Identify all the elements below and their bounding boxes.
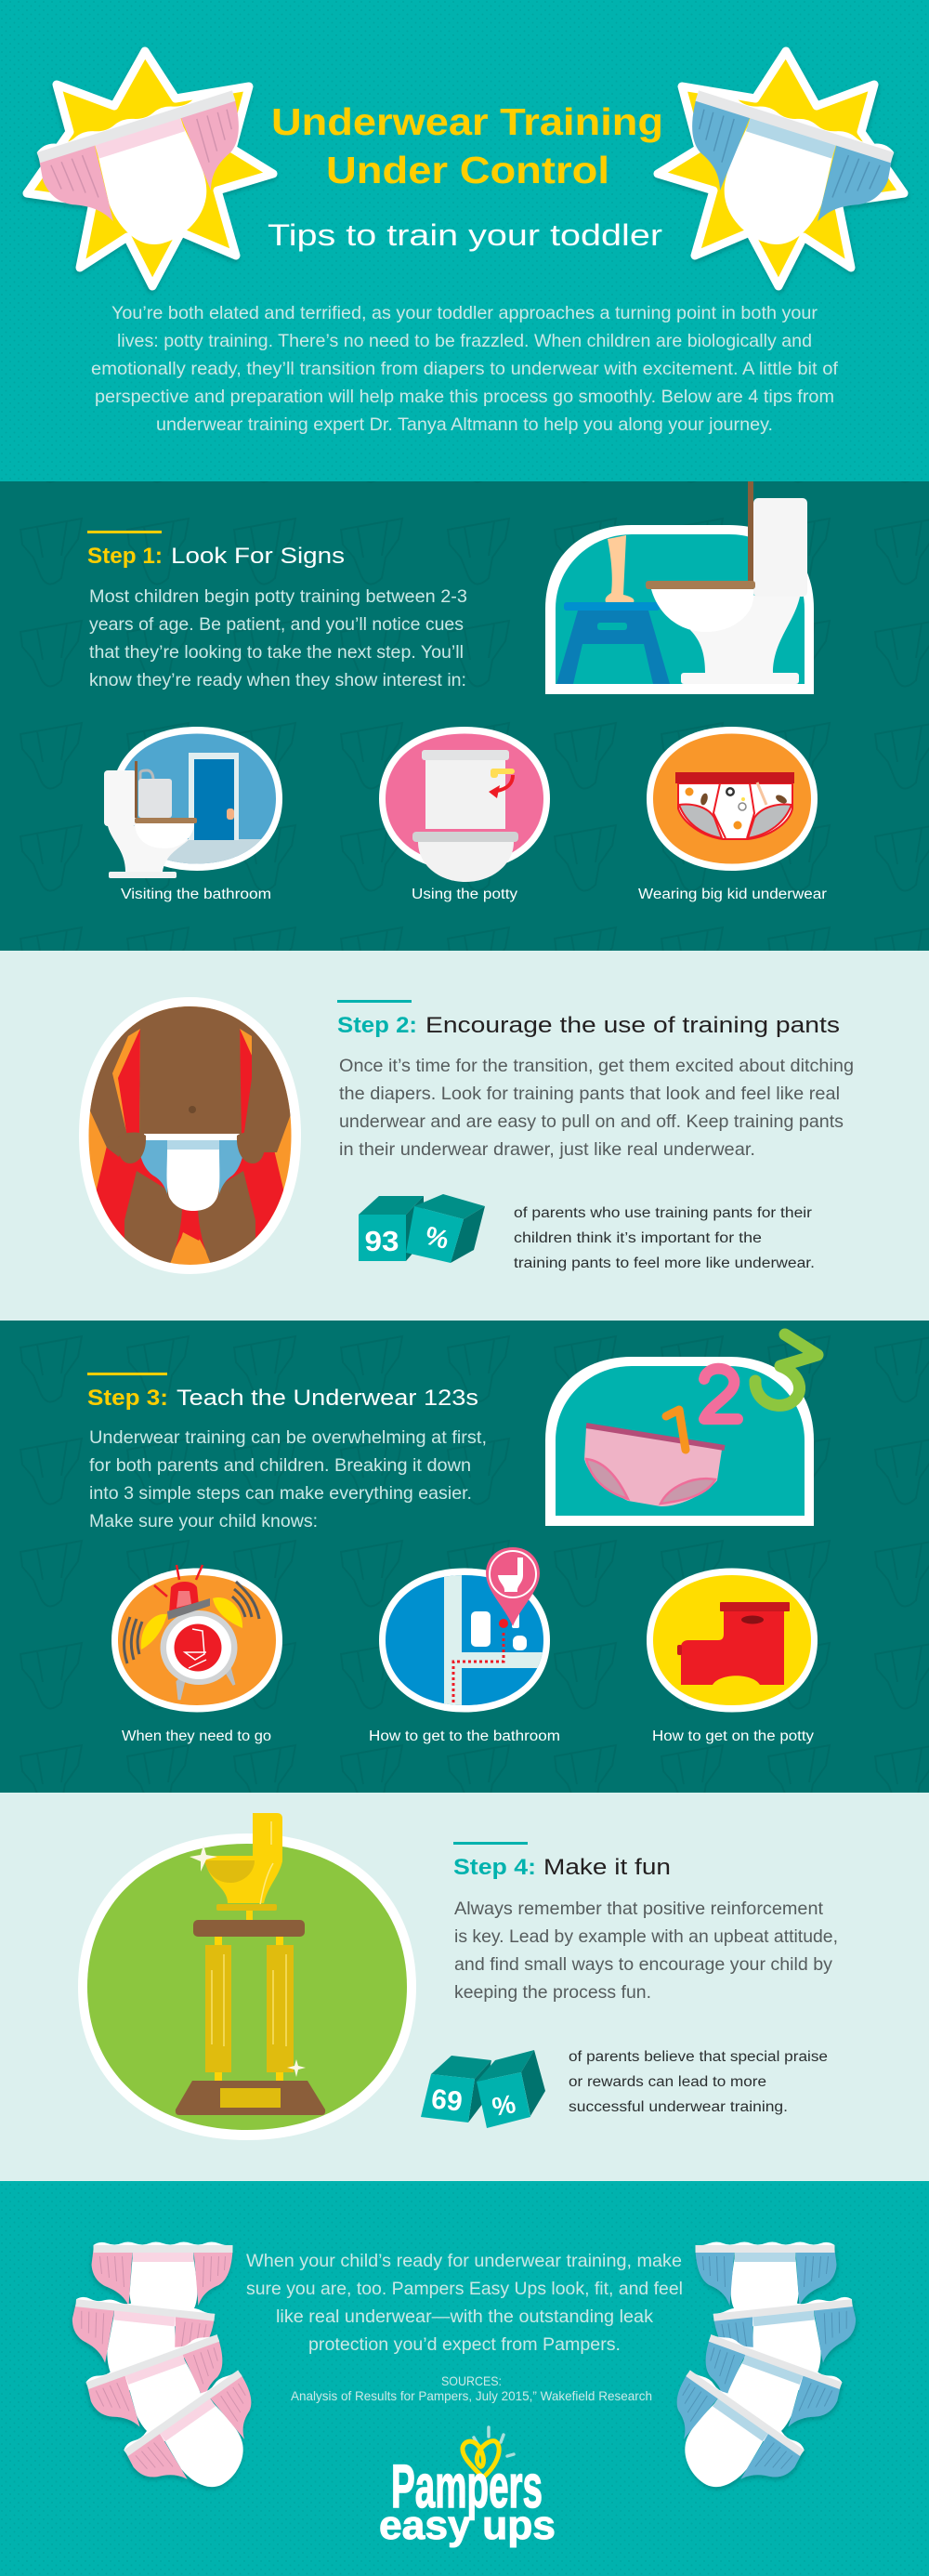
panel: step 1: [0, 481, 929, 951]
intro text: perspective and preparation will help make this process go smoothly. Below are 4 tips from: [95, 387, 834, 407]
text: step 2 body: in their underwear drawer, just like real underwear.: [339, 1139, 755, 1160]
text: step 4 body: keeping the process fun.: [454, 1982, 651, 2003]
text: sources: Analysis of Results for Pampers, July 2015,” Wakefield Research: [291, 2388, 652, 2403]
text: closing message: sure you are, too. Pampers Easy Ups look, fit, and feel: [246, 2279, 683, 2299]
icon: stack of blue training pants: [641, 2241, 862, 2520]
text: step 2 body: underwear and are easy to pull on and off. Keep training pants: [339, 1111, 844, 1132]
title: Underwear Training: [271, 100, 663, 143]
icon: potty chair: [647, 1569, 818, 1712]
icon: alarm clock: [111, 1565, 282, 1712]
heading: step 1: Step 1:: [87, 544, 163, 569]
heading: step 1: [87, 544, 345, 569]
stat text: 69%: successful underwear training.: [569, 2099, 788, 2115]
text: step 2 body: [339, 1056, 854, 1160]
text: closing message: like real underwear—with the outstanding leak: [276, 2307, 653, 2327]
stat blocks: 93%: [359, 1194, 485, 1263]
caption: using the potty: Using the potty: [412, 887, 517, 902]
stat blocks: 93%: 93: [364, 1225, 399, 1257]
icon: using the potty: [379, 727, 550, 882]
text: step 2 body: the diapers. Look for training pants that look and feel like real: [339, 1084, 840, 1104]
stat blocks: 69%: 69: [430, 2083, 464, 2118]
caption: when they need to go: When they need to go: [122, 1728, 271, 1744]
title: Under Control: [326, 149, 609, 191]
intro text: emotionally ready, they’ll transition from diapers to underwear with excitement. A little bit of: [91, 359, 839, 379]
text: step 3 body: into 3 simple steps can make everything easier.: [89, 1483, 472, 1504]
text: step 3 body: for both parents and children. Breaking it down: [89, 1455, 471, 1476]
stat text: 93%: [514, 1205, 815, 1271]
icon: sunburst with pink training pants: [27, 51, 273, 286]
heading: step 3: Teach the Underwear 123s: [177, 1386, 478, 1411]
caption: how to get to the bathroom: How to get to the bathroom: [369, 1728, 560, 1744]
text: step 4 body: is key. Lead by example with an upbeat attitude,: [454, 1926, 838, 1947]
stat text: 69%: of parents believe that special praise: [569, 2049, 828, 2065]
icon: toilet: [646, 481, 807, 684]
illustration: toilet trophy: [78, 1813, 416, 2140]
icon: map to bathroom: [379, 1547, 550, 1712]
panel: header: [0, 0, 929, 481]
icon: map pin: [486, 1547, 540, 1626]
stat text: 93%: training pants to feel more like underwear.: [514, 1255, 815, 1271]
icon: visiting the bathroom: [104, 725, 288, 878]
number 1: [666, 1410, 686, 1450]
stat blocks: 93%: %: [422, 1221, 452, 1255]
caption: how to get on the potty: How to get on the potty: [652, 1728, 814, 1744]
stat blocks: 69%: [421, 2050, 545, 2128]
text: step 1 body: that they’re looking to take the next step. You’ll: [89, 642, 464, 663]
text: step 1 body: Most children begin potty training between 2-3: [89, 586, 467, 607]
heading: step 1: Look For Signs: [171, 544, 345, 569]
panel: step 4: [0, 1793, 929, 2181]
logo: Pampers easy ups: [379, 2427, 556, 2548]
number 3: [755, 1334, 818, 1405]
stat blocks: 69%: %: [490, 2089, 517, 2122]
text: step 1 body: know they’re ready when they show interest in:: [89, 670, 466, 690]
heading: step 4: Make it fun: [543, 1855, 671, 1880]
text: closing message: [246, 2251, 683, 2355]
intro text: underwear training expert Dr. Tanya Altmann to help you along your journey.: [156, 414, 773, 435]
heading: step 2: Encourage the use of training pants: [425, 1013, 840, 1038]
caption: big kid underwear: Wearing big kid underwear: [638, 887, 827, 902]
icon: leg: [606, 535, 635, 602]
text: sources: SOURCES:: [441, 2373, 502, 2388]
subtitle: Tips to train your toddler: [268, 218, 662, 252]
text: step 3 body: Underwear training can be overwhelming at first,: [89, 1427, 487, 1448]
heading: step 3: Step 3:: [87, 1386, 168, 1411]
intro text: [91, 303, 839, 435]
text: step 4 body: Always remember that positive reinforcement: [454, 1899, 824, 1919]
text: step 4 body: and find small ways to encourage your child by: [454, 1954, 832, 1975]
intro text: lives: potty training. There’s no need to be frazzled. When children are biologically and: [117, 331, 812, 351]
text: step 1 body: [89, 586, 467, 690]
icon: step stool: [556, 602, 670, 684]
caption: visiting the bathroom: Visiting the bathroom: [121, 887, 271, 902]
text: step 4 body: [454, 1899, 838, 2003]
heading: step 4: [453, 1855, 671, 1880]
text: sources: [291, 2373, 652, 2403]
intro text: You’re both elated and terrified, as your toddler approaches a turning point in both your: [111, 303, 818, 323]
stat text: 69%: or rewards can lead to more: [569, 2074, 766, 2090]
text: step 1 body: years of age. Be patient, and you’ll notice cues: [89, 614, 464, 635]
logo: Pampers easy ups: Pampers: [391, 2451, 543, 2520]
stat text: 93%: children think it’s important for the: [514, 1230, 762, 1246]
stat text: 93%: of parents who use training pants for their: [514, 1205, 812, 1221]
stat text: 69%: [569, 2049, 828, 2115]
illustration: child on stool at toilet: [545, 481, 814, 694]
heading: step 3: [87, 1386, 478, 1411]
illustration: toddler pulling up training pants: [79, 997, 301, 1274]
text: closing message: protection you’d expect from Pampers.: [308, 2334, 621, 2355]
number 2: [704, 1369, 738, 1419]
text: closing message: When your child’s ready for underwear training, make: [246, 2251, 682, 2271]
icon: big kid underwear: [647, 727, 818, 871]
heading: step 2: Step 2:: [337, 1013, 417, 1038]
text: step 3 body: [89, 1427, 487, 1531]
illustration: underwear with 1 2 3: [545, 1334, 818, 1526]
icon: sunburst with blue training pants: [658, 51, 904, 286]
title: [271, 100, 663, 191]
logo: Pampers easy ups: easy ups: [379, 2503, 556, 2548]
text: step 3 body: Make sure your child knows:: [89, 1511, 318, 1531]
heading: step 4: Step 4:: [453, 1855, 536, 1880]
panel: step 3: [0, 1321, 929, 1793]
icon: stack of pink training pants: [66, 2241, 287, 2520]
panel: step 2: [0, 951, 929, 1321]
text: step 2 body: Once it’s time for the transition, get them excited about ditching: [339, 1056, 854, 1076]
panel: footer: [0, 2181, 929, 2576]
